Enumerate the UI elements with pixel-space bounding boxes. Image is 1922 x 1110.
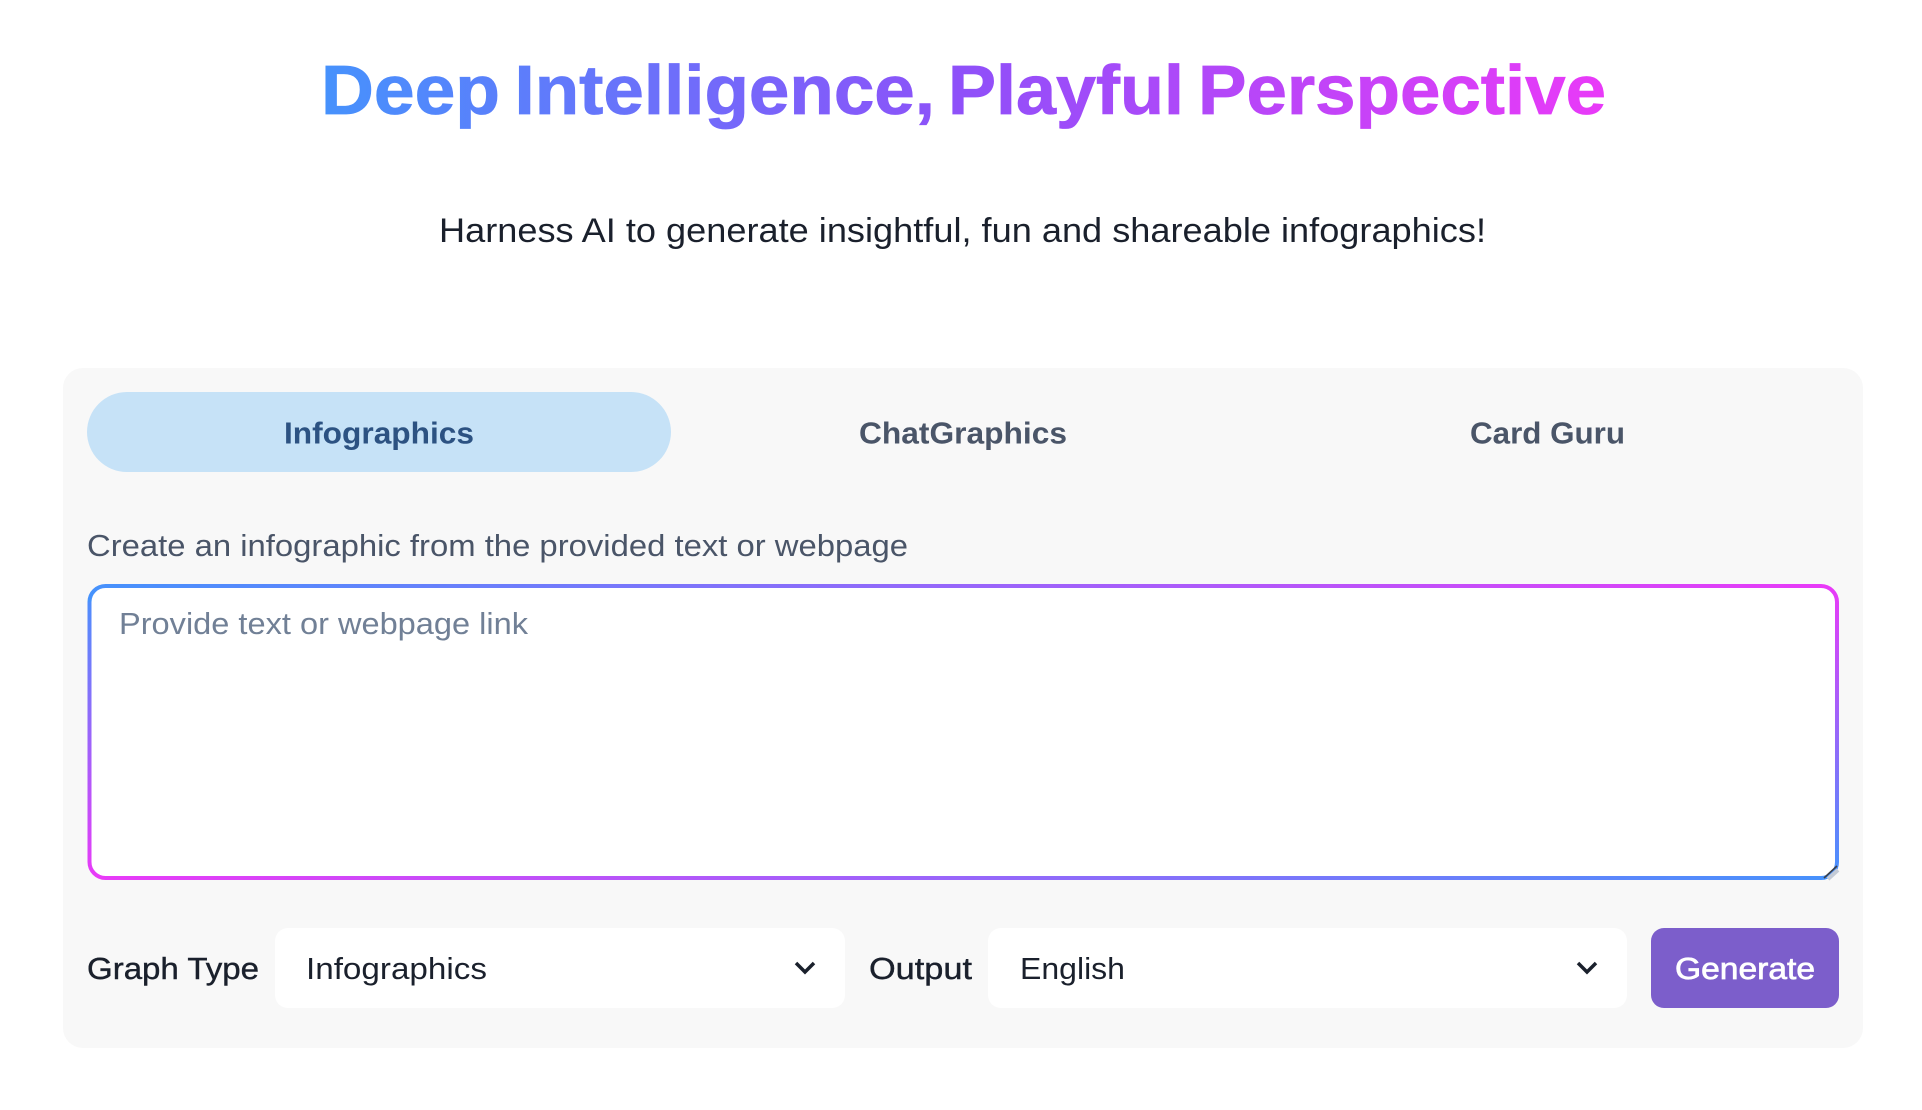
text input box with gradient border bbox=[90, 586, 1837, 878]
title: Playful bbox=[948, 51, 1184, 129]
select: Graph Type bbox=[275, 928, 845, 1008]
title: Deep bbox=[321, 51, 500, 129]
title: Intelligence, bbox=[514, 51, 935, 129]
tab: Infographics (active): Infographics bbox=[284, 416, 474, 450]
tab: ChatGraphics: ChatGraphics bbox=[859, 416, 1067, 450]
label: Graph Type: Graph Type bbox=[87, 952, 259, 986]
select: Output bbox=[988, 928, 1627, 1008]
select: Graph Type: Infographics bbox=[306, 952, 487, 986]
subtitle: Harness AI to generate insightful, fun and shareable infographics! bbox=[439, 212, 1486, 250]
label: Output: Output bbox=[869, 952, 973, 986]
button: Generate: Generate bbox=[1675, 952, 1815, 986]
panel: generator form bbox=[63, 368, 1863, 1048]
tab: Card Guru: Card Guru bbox=[1470, 416, 1625, 450]
icon: chevron bbox=[796, 963, 814, 972]
title bbox=[321, 51, 1606, 129]
icon: resize handle bbox=[1824, 866, 1838, 879]
select: Output: English bbox=[1020, 952, 1125, 986]
button: Generate bbox=[1651, 928, 1839, 1008]
placeholder text: Provide text or webpage link bbox=[119, 607, 529, 641]
tab: Infographics (active) bbox=[87, 392, 671, 472]
title: Perspective bbox=[1198, 51, 1606, 129]
icon: chevron bbox=[1578, 963, 1596, 972]
form description: Create an infographic from the provided text or webpage bbox=[87, 529, 908, 563]
